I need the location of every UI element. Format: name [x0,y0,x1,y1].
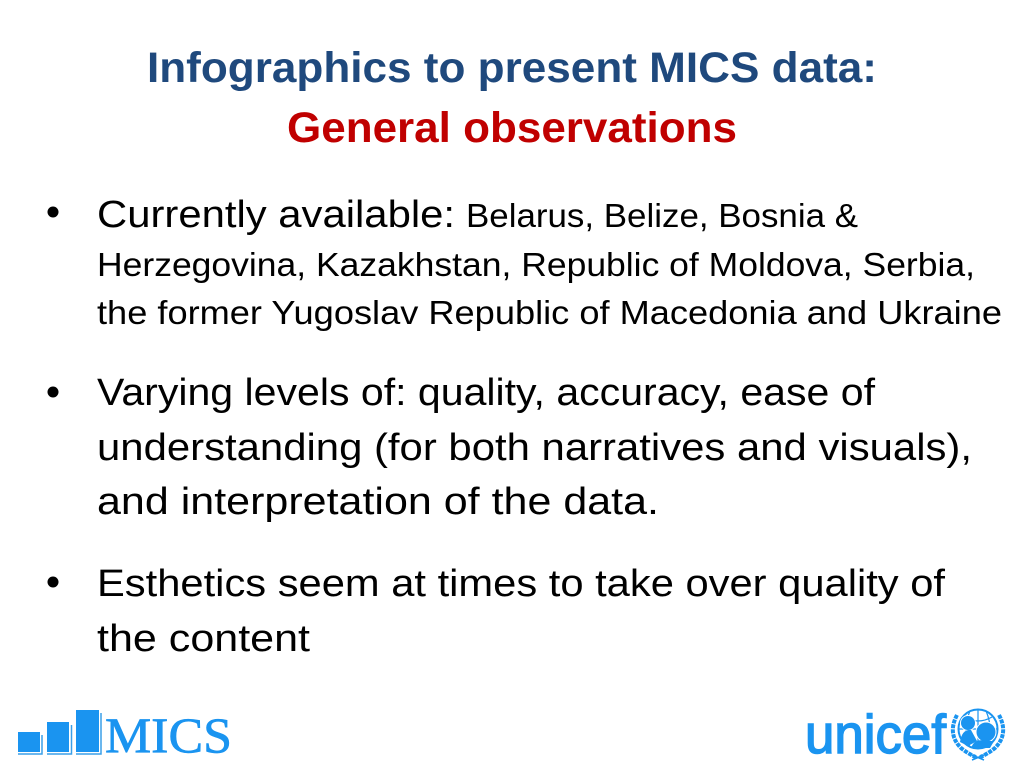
icon: unicef emblem [953,710,1003,760]
bullet: varying levels: Varying levels of: quality, accuracy, ease of [97,372,875,414]
logo: MICS [18,707,232,763]
title: General observations [287,104,737,152]
bullet: varying levels [48,372,972,523]
bullet: varying levels: and interpretation of the data. [97,481,659,523]
logo: unicef: unicef [805,703,947,765]
bullet: esthetics: the content [97,618,310,660]
bullet: esthetics [48,563,945,660]
bullet: currently available: the former Yugoslav Republic of Macedonia and Ukraine [97,294,1002,331]
bullet: currently available: Currently available: [97,194,455,236]
title: Infographics to present MICS data: [147,44,877,92]
bullet: currently available [48,194,1002,331]
bullet: esthetics: Esthetics seem at times to take over quality of [97,563,945,605]
bullet: varying levels: understanding (for both narratives and visuals), [97,427,972,469]
logo: MICS: MICS [105,707,232,763]
title [147,44,877,152]
bullet: currently available: Belarus, Belize, Bosnia & [466,197,858,234]
bullet: currently available: Herzegovina, Kazakhstan, Republic of Moldova, Serbia, [97,246,975,283]
